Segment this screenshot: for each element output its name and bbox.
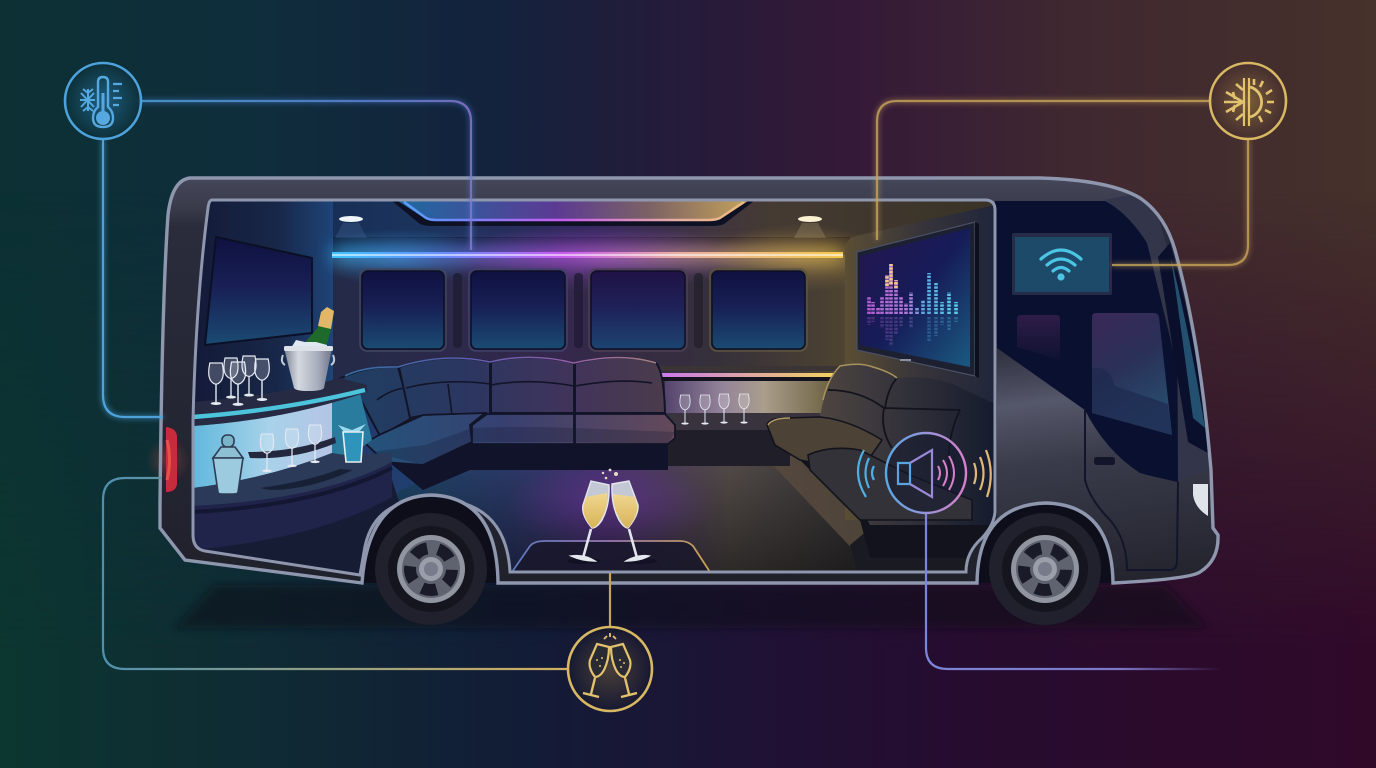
wheel arches bbox=[364, 497, 1112, 583]
bus body shell bbox=[146, 178, 1230, 590]
right wall bbox=[845, 205, 995, 520]
shot rack bbox=[248, 437, 336, 458]
bar counter bbox=[193, 378, 392, 550]
sofa base bbox=[392, 444, 668, 490]
front upper dark glass area bbox=[995, 201, 1178, 482]
door handle bbox=[1094, 457, 1115, 465]
right sofa back bbox=[820, 364, 995, 525]
headlight bbox=[1193, 484, 1208, 516]
connector: thermometer to rear of bus bbox=[103, 139, 163, 417]
icon: climate sun and snow bbox=[1210, 63, 1286, 139]
ceiling spot lights bbox=[335, 216, 826, 238]
interior cutaway bbox=[190, 198, 1000, 580]
door outline bbox=[1085, 410, 1178, 570]
wall colour glow bbox=[477, 228, 725, 288]
connector: climate to wifi bbox=[1112, 139, 1248, 265]
side wall with windows bbox=[332, 255, 844, 390]
rear wall bbox=[190, 198, 333, 410]
illuminated glass panel bbox=[193, 402, 332, 488]
rear wheel bbox=[375, 513, 487, 625]
right sofa seat two bbox=[808, 448, 972, 520]
right sofa seat one bbox=[766, 416, 883, 461]
rear window bbox=[205, 237, 312, 345]
connector: climate to TV bbox=[877, 101, 1210, 240]
top bar shelf bbox=[193, 378, 367, 426]
right sofa base bbox=[801, 461, 874, 556]
dark floor edges bbox=[195, 480, 399, 573]
connector: speaker to right bbox=[926, 513, 1222, 669]
right sofa bbox=[767, 364, 1000, 558]
windshield bbox=[1158, 243, 1208, 453]
connector: champagne up to floor bbox=[609, 573, 611, 627]
front wheel bbox=[989, 513, 1101, 625]
large champagne flutes bbox=[567, 469, 657, 564]
champagne bucket and bottle bbox=[282, 307, 334, 391]
windows bbox=[360, 269, 807, 351]
lower bar shelf bbox=[193, 453, 392, 506]
tail light bbox=[146, 427, 190, 492]
interior outline bbox=[193, 200, 995, 575]
wifi screen bbox=[1012, 233, 1112, 295]
front lower body panel bbox=[997, 348, 1216, 554]
interior base bbox=[194, 202, 992, 547]
bus outer outline bbox=[160, 178, 1218, 583]
cocktail shaker bbox=[213, 435, 243, 494]
equalizer reflection bbox=[869, 317, 956, 346]
door window bbox=[1092, 313, 1172, 435]
sofa top highlight bbox=[345, 357, 656, 376]
connector: thermometer to ceiling light bbox=[141, 101, 471, 250]
icon: champagne toast bbox=[568, 627, 652, 711]
LED strip bbox=[332, 249, 843, 261]
ceiling cove light bbox=[392, 201, 754, 226]
upper front side strip bbox=[1105, 194, 1208, 482]
TV screen bbox=[857, 222, 979, 378]
bus bbox=[146, 178, 1230, 625]
ground shadow bbox=[175, 585, 1207, 628]
floor bbox=[397, 466, 857, 570]
equalizer bars bbox=[869, 264, 956, 314]
bubbles bbox=[602, 469, 618, 479]
sofa back cushions bbox=[335, 357, 665, 436]
ceiling shade bbox=[333, 202, 992, 238]
wine glasses on top shelf bbox=[209, 356, 269, 406]
carpet bbox=[512, 541, 710, 572]
back bar with lights bbox=[660, 366, 850, 466]
bar rack glasses bbox=[260, 425, 322, 472]
icon: thermometer with snowflake bbox=[65, 63, 141, 139]
sofa seats bbox=[365, 413, 675, 465]
icon: speaker with sound waves bbox=[858, 433, 991, 513]
small glasses on back shelf bbox=[680, 394, 749, 425]
blue cocktail bbox=[338, 424, 366, 462]
back cushion details bbox=[377, 381, 652, 415]
connector: tail to champagne bbox=[103, 478, 568, 669]
main sofa bbox=[335, 357, 675, 490]
bar base bbox=[193, 462, 392, 550]
seat shading bbox=[372, 427, 675, 465]
small side window bbox=[1017, 315, 1060, 360]
